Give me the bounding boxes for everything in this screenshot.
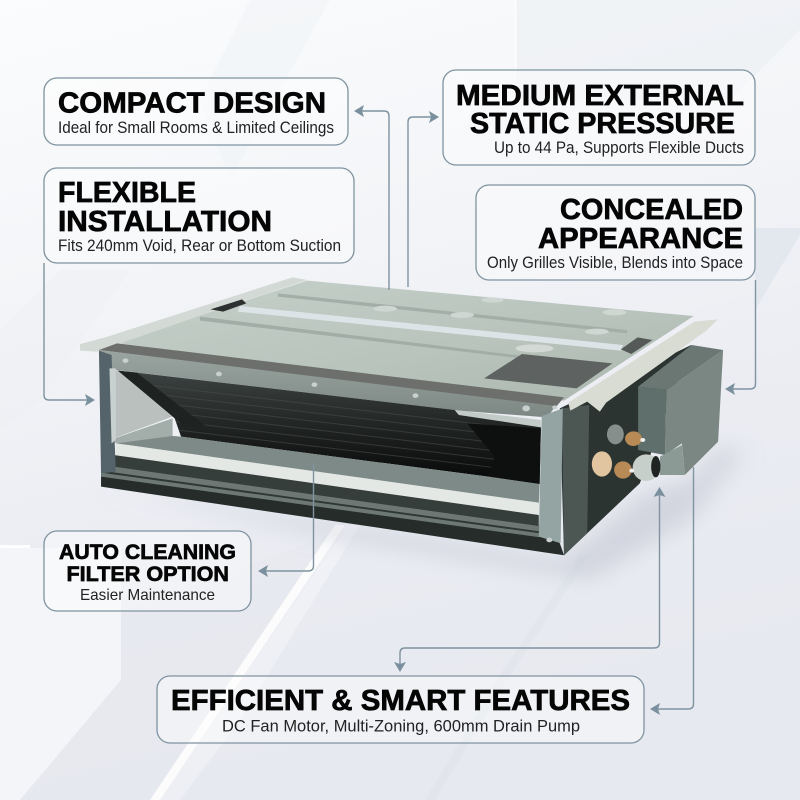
electrical box (638, 345, 723, 475)
heading: EFFICIENT & SMART FEATURES (171, 685, 630, 717)
panel: efficient and smart features (157, 676, 644, 743)
knockout discs (373, 306, 397, 312)
heading: FLEXIBLE (58, 177, 196, 209)
connector: auto cleaning filter (258, 463, 314, 577)
connector: drain to efficient features (394, 487, 666, 672)
gasket strip (99, 343, 564, 407)
heading line 2: INSTALLATION (58, 206, 272, 238)
panel: concealed appearance (476, 185, 755, 280)
connector: compact design (354, 105, 389, 290)
description: Only Grilles Visible, Blends into Space (487, 254, 743, 272)
connector: medium external static pressure (408, 111, 439, 287)
heading: MEDIUM EXTERNAL (456, 80, 744, 112)
lower dark band (113, 455, 539, 527)
heading: AUTO CLEANING (59, 540, 236, 564)
front upper frame (99, 350, 556, 417)
panel: medium external static pressure (443, 70, 755, 165)
left mounting flange (80, 277, 307, 352)
panel: compact design (44, 78, 348, 145)
connector: flexible installation (44, 263, 95, 406)
left post (99, 351, 116, 473)
top rail (238, 306, 623, 351)
heading line 2: STATIC PRESSURE (470, 108, 735, 140)
left inner wall (112, 371, 173, 438)
white filter strip (116, 443, 539, 515)
insulation patch (484, 354, 612, 388)
lower frame band (101, 465, 564, 555)
heading: CONCEALED (560, 194, 743, 226)
right post (539, 408, 563, 543)
description: Easier Maintenance (80, 587, 215, 604)
refrigerant fittings (592, 424, 645, 479)
side panel (560, 345, 691, 555)
drain outlet (633, 454, 660, 481)
inner floor (116, 436, 540, 504)
connector: concealed appearance (725, 280, 756, 395)
right white flange (568, 319, 718, 412)
connector: electrical box to efficient features (650, 467, 694, 715)
heading: COMPACT DESIGN (58, 88, 326, 120)
top panel (120, 281, 694, 401)
panel: flexible installation (44, 168, 354, 263)
coil (118, 371, 541, 484)
description: Up to 44 Pa, Supports Flexible Ducts (494, 139, 744, 157)
heading line 2: FILTER OPTION (66, 562, 229, 586)
product: ducted indoor unit (80, 277, 741, 580)
heading line 2: APPEARANCE (538, 223, 743, 255)
description: Fits 240mm Void, Rear or Bottom Suction (58, 237, 341, 255)
description: DC Fan Motor, Multi-Zoning, 600mm Drain Pump (222, 718, 580, 736)
description: Ideal for Small Rooms & Limited Ceilings (58, 119, 334, 137)
floor shadow (105, 443, 741, 580)
panel: auto cleaning filter option (44, 531, 251, 611)
screws (123, 358, 557, 542)
